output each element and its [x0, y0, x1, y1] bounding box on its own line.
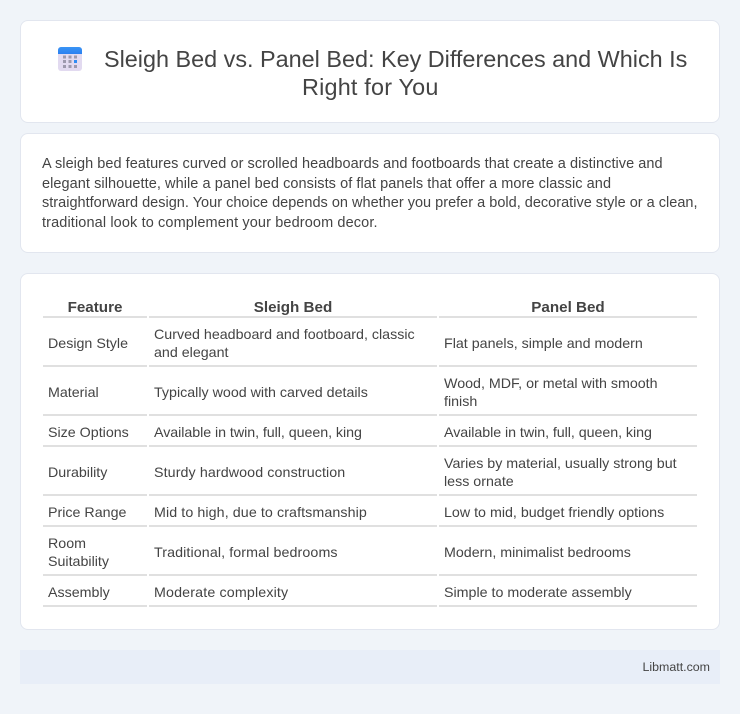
title: Sleigh Bed vs. Panel Bed: Key Differences and Which Is [104, 46, 687, 72]
panel: assembly: Simple to moderate assembly [444, 585, 632, 601]
panel: durability: less ornate [444, 474, 514, 490]
panel: durability [444, 456, 677, 490]
comparison table [43, 299, 697, 607]
icon: calendar [58, 47, 82, 71]
sleigh: room suitability: Traditional, formal bedrooms [154, 545, 338, 561]
sleigh: durability: Sturdy hardwood construction [154, 465, 345, 481]
row: price range: Price Range [48, 505, 126, 521]
sleigh: price range: Mid to high, due to craftsmanship [154, 505, 367, 521]
panel: intro text [20, 133, 720, 253]
intro paragraph [42, 156, 698, 231]
row: design style: Design Style [48, 336, 128, 352]
intro paragraph: straightforward design. Your choice depends on whether you prefer a bold, decorative style or a clean, [42, 195, 698, 211]
panel: comparison table [20, 273, 720, 630]
sleigh: design style: Curved headboard and footboard, classic [154, 327, 415, 343]
sleigh: assembly: Moderate complexity [154, 585, 288, 601]
panel: durability: Varies by material, usually strong but [444, 456, 677, 472]
panel: material [444, 376, 658, 410]
panel: price range: Low to mid, budget friendly options [444, 505, 664, 521]
title: Right for You [302, 74, 439, 100]
row: durability: Durability [48, 465, 107, 481]
row: assembly: Assembly [48, 585, 110, 601]
sleigh: size options: Available in twin, full, queen, king [154, 425, 362, 441]
intro paragraph: A sleigh bed features curved or scrolled headboards and footboards that create a distinctive and [42, 156, 663, 172]
title [104, 46, 687, 100]
row: room suitability: Suitability [48, 554, 109, 570]
footer credit: Libmatt.com [643, 660, 710, 674]
row: room suitability: Room [48, 536, 86, 552]
row: room suitability [48, 536, 109, 570]
panel: material: Wood, MDF, or metal with smooth [444, 376, 658, 392]
sleigh: design style: and elegant [154, 345, 228, 361]
table header: Sleigh Bed: Sleigh Bed [254, 299, 332, 316]
table header: Feature: Feature [68, 299, 122, 316]
row: size options: Size Options [48, 425, 129, 441]
panel: material: finish [444, 394, 477, 410]
footer [20, 650, 720, 684]
intro paragraph: elegant silhouette, while a panel bed consists of flat panels that offer a more classic and [42, 176, 611, 192]
row: material: Material [48, 385, 99, 401]
panel: room suitability: Modern, minimalist bedrooms [444, 545, 631, 561]
intro paragraph: traditional look to complement your bedroom decor. [42, 215, 378, 231]
panel: size options: Available in twin, full, queen, king [444, 425, 652, 441]
panel: header [20, 20, 720, 123]
table header: Panel Bed: Panel Bed [531, 299, 605, 316]
sleigh: design style [154, 327, 415, 361]
sleigh: material: Typically wood with carved details [154, 385, 368, 401]
panel: design style: Flat panels, simple and modern [444, 336, 643, 352]
